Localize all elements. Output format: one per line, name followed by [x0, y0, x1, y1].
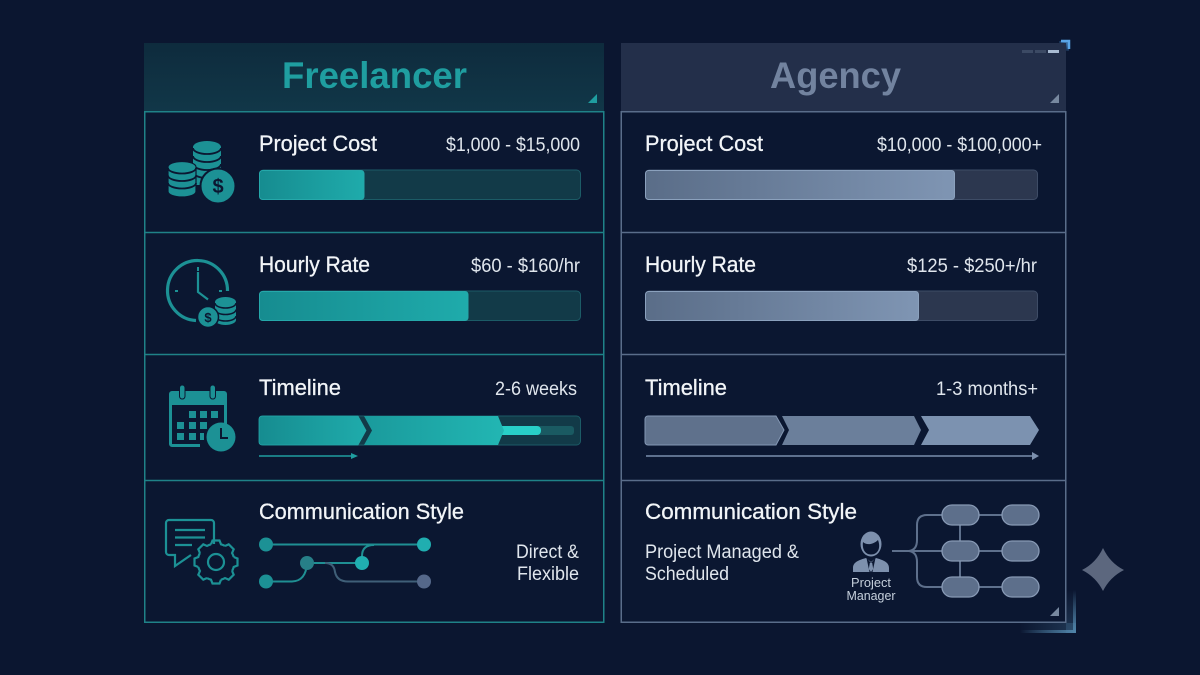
label: hourly rate: Hourly Rate: [645, 252, 756, 277]
row: freelancer timeline: [169, 375, 580, 459]
bar: freelancer hourly rate: [260, 291, 580, 320]
label: communication style: Communication Style: [259, 499, 464, 524]
corner glow: bottom right: [1020, 590, 1076, 633]
value: agency timeline: 1-3 months+: [936, 379, 1038, 400]
value: agency hourly range: $125 - $250+/hr: [907, 256, 1038, 277]
icon: calendar with clock: [169, 385, 236, 452]
icon: coins: [168, 141, 236, 204]
icon: clock with coins: $: [204, 310, 212, 325]
value: project managed and scheduled: [645, 542, 799, 585]
bar: agency hourly rate: [646, 291, 1038, 320]
value: direct and flexible: Flexible: [517, 564, 579, 585]
value: project managed and scheduled: Project Managed &: [645, 542, 799, 563]
corner marker: [1050, 607, 1059, 616]
org chart: [892, 505, 1039, 597]
icon: project manager: Project: [851, 575, 891, 590]
icon: coins: $: [212, 176, 224, 198]
freelancer table frame: [145, 112, 604, 622]
network diagram: direct: [259, 538, 431, 588]
value: direct and flexible: [516, 542, 579, 585]
value: freelancer cost range: $1,000 - $15,000: [446, 135, 580, 156]
row: agency timeline: [645, 375, 1039, 460]
bar: freelancer project cost: [260, 170, 580, 200]
corner glow: top right: [1060, 41, 1069, 50]
panel: freelancer: [144, 43, 604, 622]
icon: project manager: Manager: [846, 588, 896, 603]
value: project managed and scheduled: Scheduled: [645, 564, 729, 585]
label: timeline: Timeline: [645, 375, 727, 400]
icon: chat and gear: [166, 520, 238, 584]
value: freelancer hourly range: $60 - $160/hr: [471, 256, 581, 277]
label: timeline: Timeline: [259, 375, 341, 400]
bar: agency project cost: [646, 170, 1038, 200]
agency header: Agency: [770, 55, 901, 96]
value: agency cost range: $10,000 - $100,000+: [877, 135, 1042, 156]
row: agency hourly rate: [645, 252, 1038, 320]
label: project cost: Project Cost: [645, 131, 763, 156]
icon: project manager: [846, 532, 896, 603]
label: communication style: Communication Style: [645, 499, 857, 524]
agency header: [621, 43, 1066, 111]
freelancer header: [144, 43, 604, 111]
agency table frame: [621, 112, 1066, 622]
icon: clock with coins: [168, 261, 236, 328]
chevron bar: freelancer timeline: [259, 416, 580, 459]
row: freelancer communication: [166, 499, 579, 588]
value: freelancer timeline: 2-6 weeks: [495, 379, 577, 400]
row: agency communication: [645, 499, 1059, 616]
icon: sparkle: [1082, 548, 1124, 591]
row: freelancer hourly rate: [168, 252, 581, 328]
freelancer header: Freelancer: [282, 55, 467, 96]
panel: agency: [621, 41, 1076, 633]
label: project cost: Project Cost: [259, 131, 377, 156]
value: direct and flexible: Direct &: [516, 542, 579, 563]
label: hourly rate: Hourly Rate: [259, 252, 370, 277]
row: freelancer project cost: [168, 131, 580, 204]
chevron bar: agency timeline: [645, 416, 1039, 460]
row: agency project cost: [645, 131, 1042, 200]
